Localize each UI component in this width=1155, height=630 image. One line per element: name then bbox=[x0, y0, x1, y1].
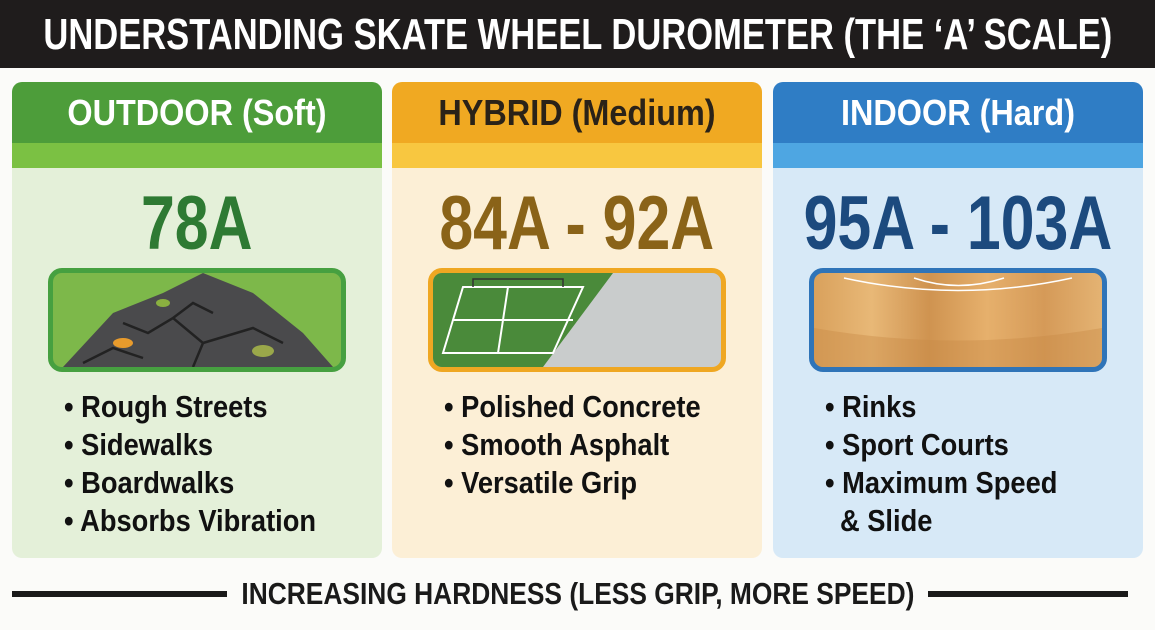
number: 78A: 78A bbox=[141, 181, 253, 266]
panel: indoor bbox=[773, 82, 1143, 558]
bullet list: hybrid bbox=[444, 389, 701, 500]
footer: hardness arrow bbox=[12, 576, 1128, 611]
panel: hybrid bbox=[392, 82, 762, 558]
bullet list: outdoor: • Rough Streets bbox=[64, 389, 268, 424]
heading: outdoor bbox=[12, 82, 382, 143]
image: cracked asphalt bbox=[48, 268, 346, 372]
bullet list: hybrid: • Polished Concrete bbox=[444, 389, 701, 424]
bullet list: outdoor: • Sidewalks bbox=[64, 427, 213, 462]
title bbox=[0, 0, 1155, 68]
bullet list: indoor bbox=[825, 389, 1057, 538]
bullet list: indoor: • Sport Courts bbox=[825, 427, 1009, 462]
bullet list: outdoor: • Boardwalks bbox=[64, 465, 234, 500]
heading: hybrid: HYBRID (Medium) bbox=[438, 92, 716, 133]
number: 95A-103A: 95A - 103A bbox=[804, 181, 1112, 266]
bullet list: indoor: & Slide bbox=[840, 503, 932, 538]
number: 84A-92A: 84A - 92A bbox=[440, 181, 714, 266]
heading: hybrid bbox=[392, 82, 762, 143]
footer: hardness arrow: INCREASING HARDNESS (LESS GRIP, MORE SPEED) bbox=[241, 576, 914, 611]
bullet list: outdoor bbox=[64, 389, 316, 538]
bullet list: indoor: • Rinks bbox=[825, 389, 916, 424]
image: tennis court and concrete bbox=[428, 268, 726, 372]
bullet list: hybrid: • Versatile Grip bbox=[444, 465, 637, 500]
title: UNDERSTANDING SKATE WHEEL DUROMETER (THE ‘A’ SCALE) bbox=[43, 10, 1112, 59]
bullet list: hybrid: • Smooth Asphalt bbox=[444, 427, 669, 462]
image: wood floor bbox=[809, 268, 1107, 372]
panel: outdoor bbox=[12, 82, 382, 558]
heading: indoor: INDOOR (Hard) bbox=[841, 92, 1075, 133]
bullet list: outdoor: • Absorbs Vibration bbox=[64, 503, 316, 538]
bullet list: indoor: • Maximum Speed bbox=[825, 465, 1057, 500]
heading: outdoor: OUTDOOR (Soft) bbox=[67, 92, 327, 133]
heading: indoor bbox=[773, 82, 1143, 143]
